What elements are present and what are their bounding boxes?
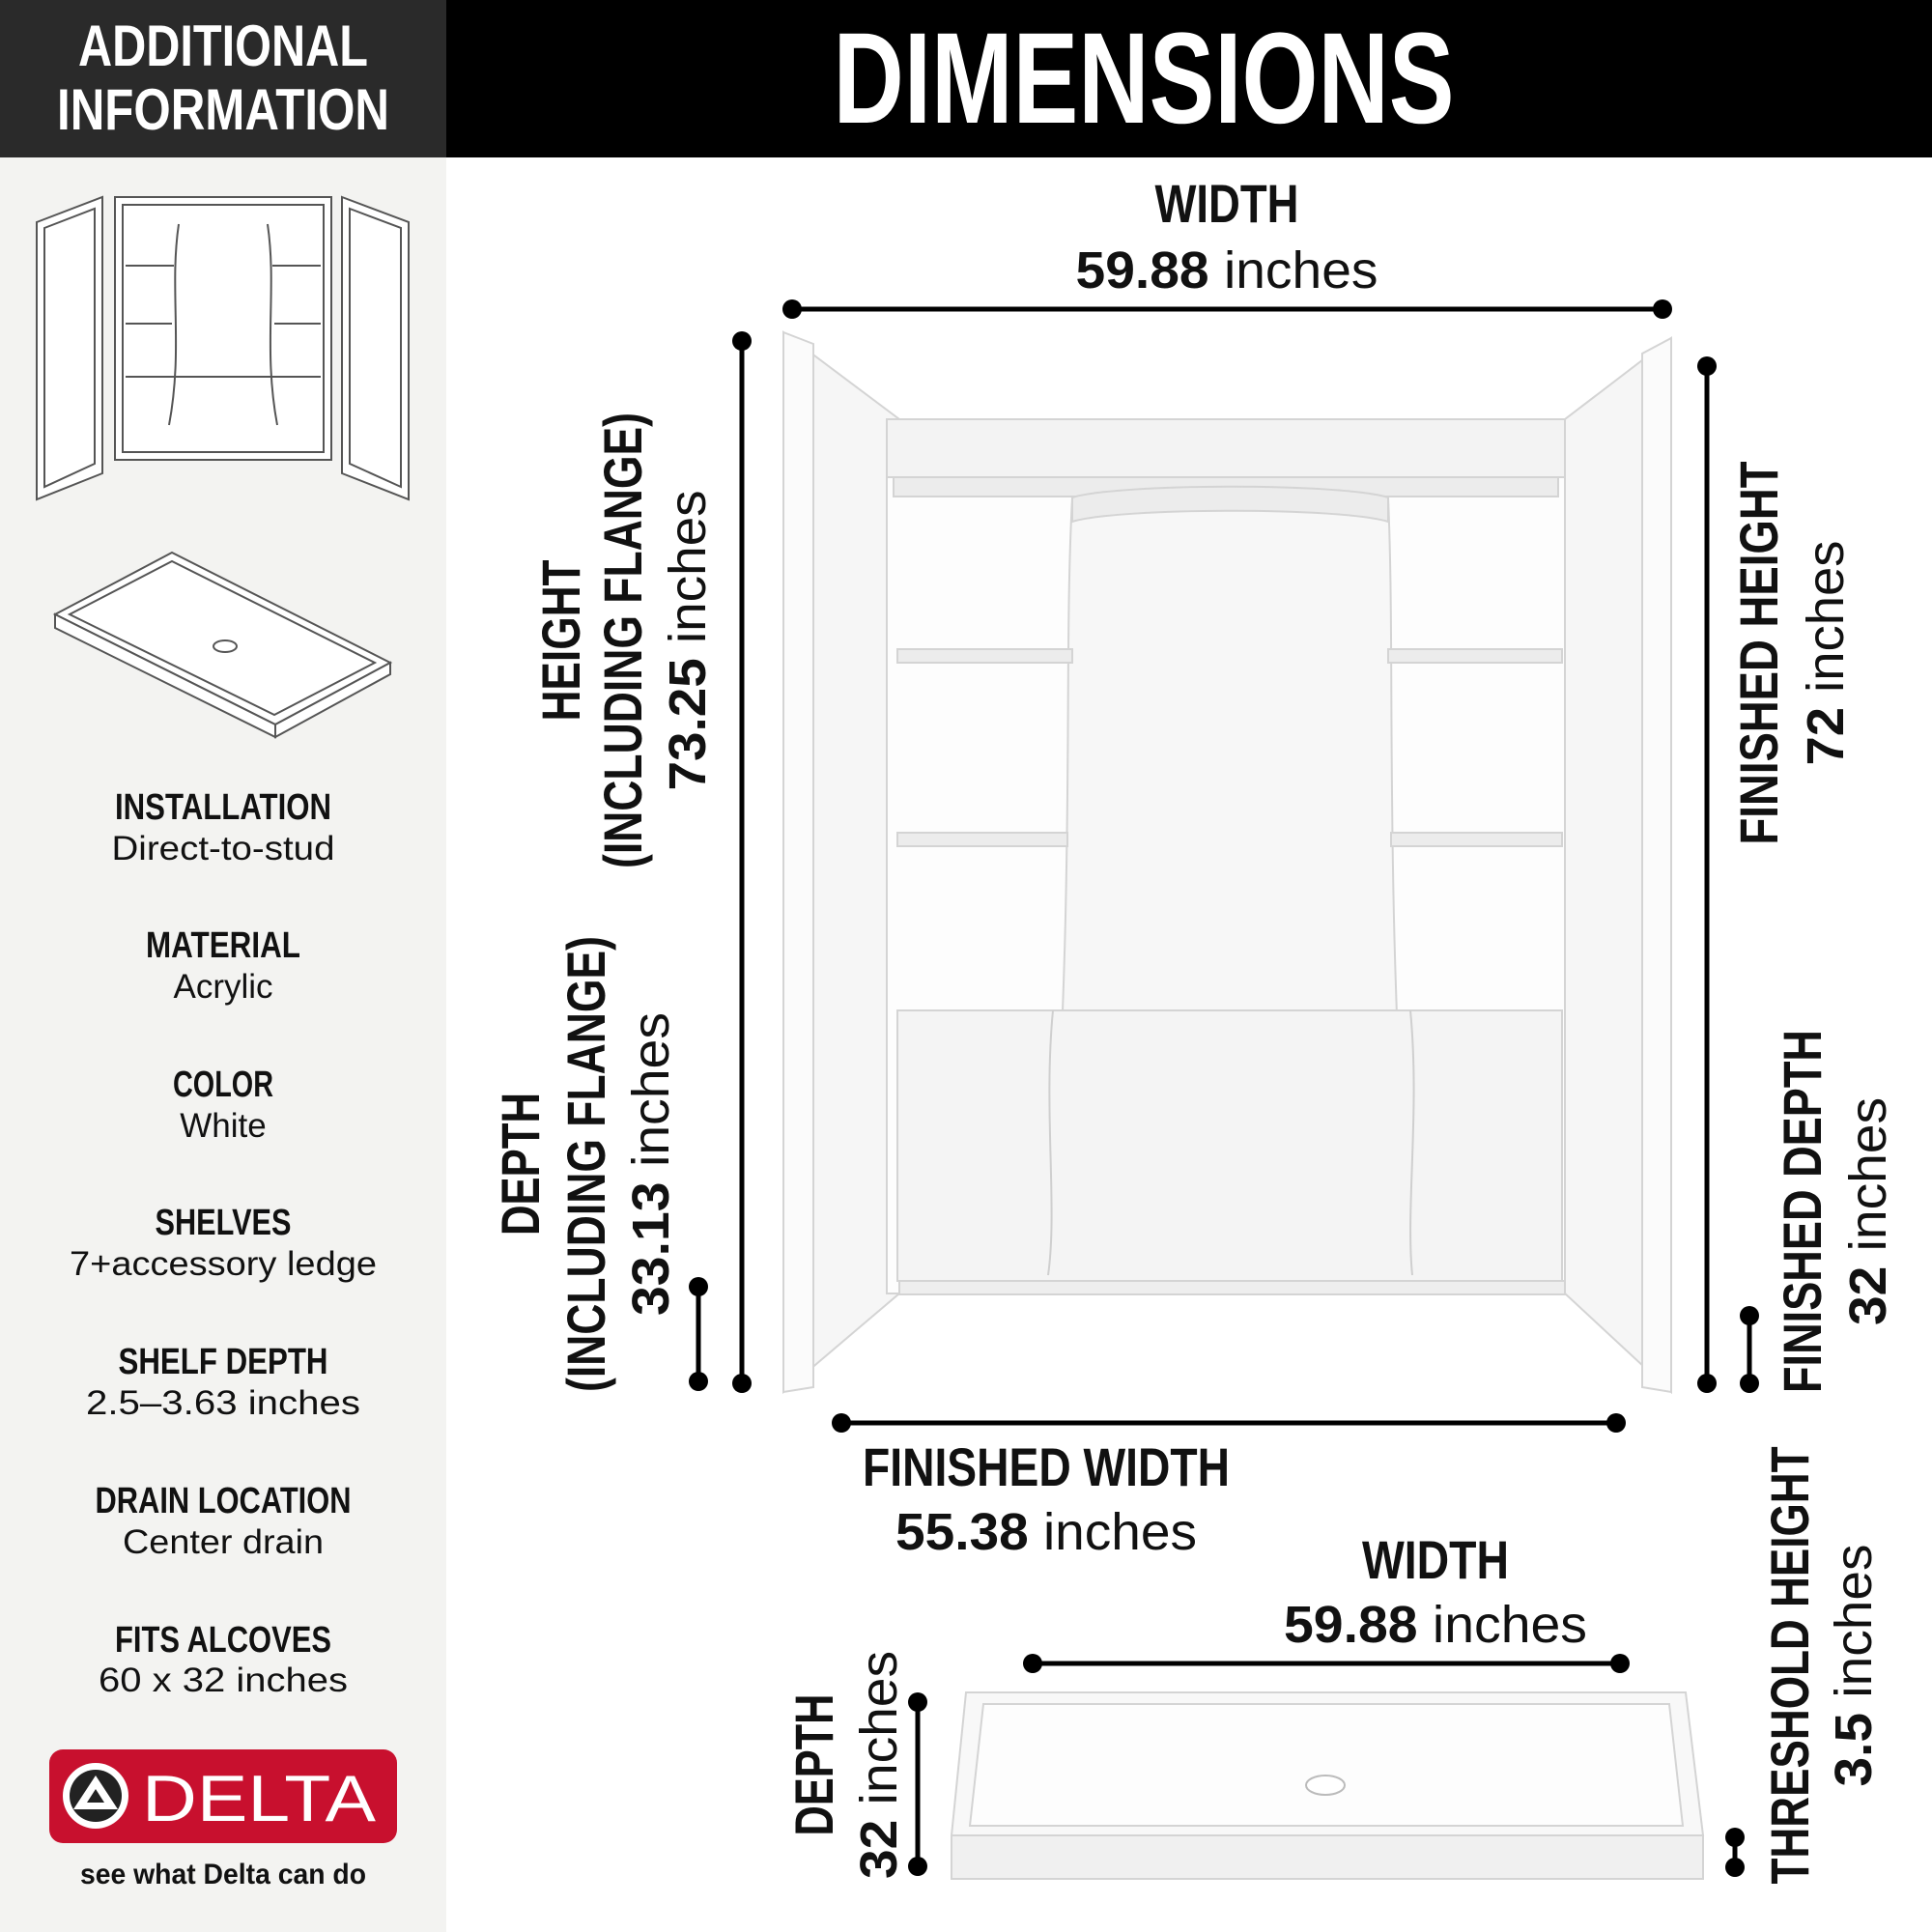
dimension: depth including flange: DEPTH: [490, 1093, 551, 1236]
header: additional information: INFORMATION: [57, 77, 389, 142]
text block: color: [173, 1065, 273, 1145]
header: additional information: ADDITIONAL: [78, 14, 368, 78]
logo: delta: see what Delta can do: [80, 1859, 366, 1890]
text block: shelf depth: SHELF DEPTH: [118, 1342, 328, 1382]
text block: shelf depth: [86, 1342, 360, 1422]
text block: shelves: [70, 1203, 377, 1283]
header: additional information: [0, 0, 446, 157]
text block: color: White: [180, 1107, 267, 1145]
dimension: finished width: 55.38 inches: [895, 1503, 1197, 1561]
logo: delta: [49, 1749, 397, 1890]
dimension: height including flange: HEIGHT: [530, 560, 591, 721]
text block: drain location: Center drain: [123, 1523, 324, 1561]
dimension: depth including flange: (INCLUDING FLANGE): [555, 936, 616, 1392]
dimension: threshold height: THRESHOLD HEIGHT: [1759, 1447, 1820, 1884]
dimension: pan depth: DEPTH: [783, 1694, 844, 1835]
dimension: height including flange: [530, 331, 752, 1393]
text block: material: Acrylic: [173, 968, 273, 1006]
text block: drain location: [95, 1481, 352, 1561]
text block: shelf depth: 2.5–3.63 inches: [86, 1384, 360, 1422]
dimension: pan width: 59.88 inches: [1284, 1596, 1587, 1654]
dimension: finished width: FINISHED WIDTH: [863, 1436, 1230, 1497]
dimension: top width: [782, 173, 1672, 319]
dimension: finished height: [1697, 356, 1855, 1393]
dimension: pan width: [1023, 1529, 1630, 1673]
text block: shelves: 7+accessory ledge: [70, 1245, 377, 1283]
dimension: threshold height: [1725, 1447, 1883, 1884]
text block: fits alcoves: [99, 1620, 348, 1699]
icon: wall panels sketch: [37, 197, 409, 499]
text block: installation: INSTALLATION: [115, 787, 331, 828]
title: dimensions: [446, 0, 1932, 157]
illustration: shower pan: [952, 1692, 1703, 1879]
text block: shelves: SHELVES: [155, 1203, 292, 1243]
dimension: finished depth: 32 inches: [1839, 1097, 1897, 1325]
dimension: finished height: 72 inches: [1797, 540, 1855, 765]
title: dimensions: DIMENSIONS: [833, 7, 1455, 151]
text block: color: COLOR: [173, 1065, 273, 1105]
text block: fits alcoves: FITS ALCOVES: [115, 1620, 331, 1661]
dimension: threshold height: 3.5 inches: [1825, 1544, 1883, 1787]
dimension: finished depth: [1740, 1030, 1897, 1393]
icon: shower pan sketch: [55, 553, 390, 737]
dimension: pan width: WIDTH: [1362, 1529, 1509, 1590]
logo: delta: DELTA: [142, 1762, 377, 1835]
panel: left sidebar background: [0, 0, 446, 1932]
dimension: height including flange: (INCLUDING FLANGE): [592, 412, 653, 868]
text block: drain location: DRAIN LOCATION: [95, 1481, 352, 1521]
text block: installation: [112, 787, 334, 867]
dimension: top width: 59.88 inches: [1076, 242, 1378, 299]
text block: material: [146, 925, 300, 1006]
text block: material: MATERIAL: [146, 925, 300, 966]
dimension: height including flange: 73.25 inches: [659, 490, 717, 790]
dimension: depth including flange: 33.13 inches: [622, 1012, 680, 1316]
dimension: finished depth: FINISHED DEPTH: [1772, 1030, 1833, 1393]
text block: installation: Direct-to-stud: [112, 830, 334, 867]
dimension: pan depth: 32 inches: [850, 1651, 908, 1879]
dimension: finished width: [832, 1413, 1626, 1561]
dimension: pan depth: [783, 1651, 927, 1879]
dimension: top width: WIDTH: [1155, 173, 1298, 234]
illustration: shower wall: [783, 332, 1671, 1392]
dimension: finished height: FINISHED HEIGHT: [1728, 462, 1789, 844]
text block: fits alcoves: 60 x 32 inches: [99, 1662, 348, 1699]
dimension: depth including flange: [490, 936, 708, 1392]
